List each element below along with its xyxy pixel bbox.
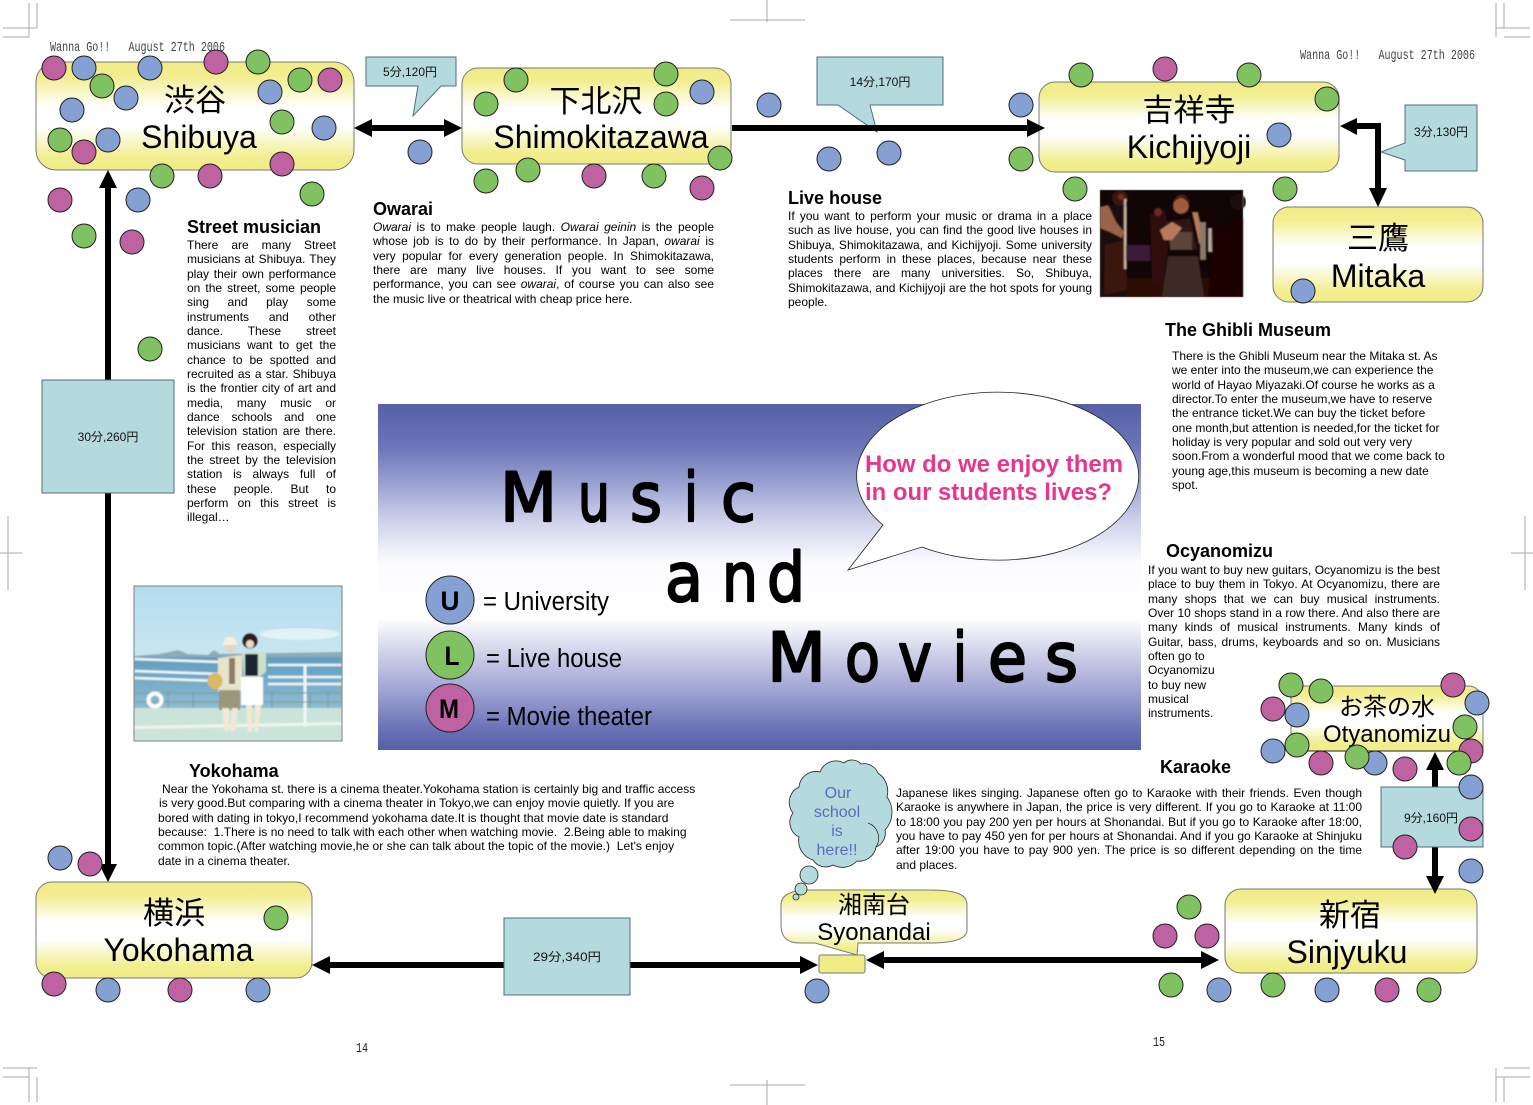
text: Yokohama xyxy=(158,782,695,868)
title: Music and Movies: i xyxy=(953,619,967,698)
legend: movie theater: = Movie theater xyxy=(486,703,652,731)
heading: Owarai: Owarai xyxy=(373,199,433,219)
title: Music and Movies: s xyxy=(630,459,662,538)
text: The Ghibli Museum: the entrance ticket.We can buy the ticket before xyxy=(1172,406,1425,420)
thought cloud: our school is here: Our xyxy=(825,785,852,802)
text: Yokohama: is very good.But comparing with a cinema theater in Tokyo,we can enjoy movie quietly. If you are xyxy=(159,796,674,810)
text: The Ghibli Museum: soon.From a wonderful mood that we come back to xyxy=(1172,449,1445,463)
text: Street musician: perform on this street is xyxy=(187,496,336,510)
text: Live house: Shimokitazawa, and Kichijyoji are the hot spots for young xyxy=(788,281,1092,295)
title: Music and Movies: o xyxy=(845,619,880,698)
text: The Ghibli Museum: holiday is very popular and sold out very very xyxy=(1172,435,1412,449)
legend: university: = University xyxy=(483,588,609,616)
station: Kichijyoji: Kichijyoji xyxy=(1127,129,1251,165)
station: Ocyanomizu: お茶の水 xyxy=(1339,694,1435,721)
text: Karaoke: Karaoke is anywhere in Japan, the price is very different. If you go to Karaoke at 11:00 xyxy=(896,800,1362,814)
station: Syonandai callout xyxy=(781,890,967,973)
text: Owarai: the music live or theatrical with cheap price here. xyxy=(373,292,632,306)
thought cloud: our school is here: here!! xyxy=(817,842,857,859)
text: Karaoke xyxy=(896,786,1362,872)
arrows xyxy=(99,118,1444,974)
station: Shimokitazawa: 下北沢 xyxy=(550,84,642,119)
text: Ocyanomizu: place to buy them in Tokyo. At Ocyanomizu, there are xyxy=(1148,577,1440,591)
legend: live house: = Live house xyxy=(486,645,622,673)
text: Street musician xyxy=(187,238,336,524)
title: Music and Movies: M xyxy=(767,619,826,698)
title: Music and Movies: d xyxy=(767,539,805,618)
text: Ocyanomizu: Guitar, bass, drums, keyboards and so on. Musicians xyxy=(1148,635,1440,649)
station: Yokohama: Yokohama xyxy=(103,932,254,968)
callout: 3 minutes 130 yen: 3分,130円 xyxy=(1414,125,1468,139)
text: Ocyanomizu: Ocyanomizu xyxy=(1148,663,1215,677)
legend: live house xyxy=(426,631,622,679)
text: Street musician: dance schools and one xyxy=(187,410,336,424)
text: Street musician: television station are there. xyxy=(187,424,336,438)
title: Music and Movies: u xyxy=(578,459,610,538)
station: Yokohama: 横浜 xyxy=(143,896,205,931)
station: Sinjyuku xyxy=(1225,889,1477,973)
text: Ocyanomizu: musical xyxy=(1148,692,1189,706)
station: Shimokitazawa xyxy=(462,68,731,164)
station: Mitaka: 三鷹 xyxy=(1347,221,1409,256)
title: Music and Movies: M xyxy=(500,459,557,538)
station: Shibuya xyxy=(36,62,354,170)
text: Street musician: play their own performance xyxy=(187,267,336,281)
text: Yokohama: common topic.(After watching movie,he or she can talk about the topic of the movie.) Let's enjoy xyxy=(158,839,674,853)
text: The Ghibli Museum: young age,this museum is becoming a new date xyxy=(1172,464,1429,478)
text: Karaoke: and places. xyxy=(896,858,957,872)
price box: Ocyanomizu to Sinjyuku: 9分,160円 xyxy=(1404,811,1458,825)
heading: Live house: Live house xyxy=(788,188,882,208)
text: Owarai: very popular for every generation people. In Shimokitazawa, xyxy=(373,249,714,263)
station: Shimokitazawa: Shimokitazawa xyxy=(493,119,709,155)
callout: 5 minutes 120 yen xyxy=(366,57,456,116)
text: Street musician: For this reason, especially xyxy=(187,439,336,453)
station: Shibuya: 渋谷 xyxy=(164,83,226,118)
text: The Ghibli Museum: There is the Ghibli Museum near the Mitaka st. As xyxy=(1172,349,1437,363)
text: Street musician: There are many Street xyxy=(187,238,336,252)
text: Live house: students perform in these places, because near these xyxy=(788,252,1092,266)
text: Ocyanomizu: to buy new xyxy=(1148,678,1206,692)
text: Ocyanomizu: If you want to buy new guitars, Ocyanomizu is the best xyxy=(1148,563,1440,577)
text: Street musician: media, many music or xyxy=(187,396,336,410)
price box: Yokohama to Syonandai xyxy=(504,918,630,995)
text: Ocyanomizu: instruments. xyxy=(1148,706,1213,720)
text: Karaoke: after 19:00 you have to pay 900 yen. The price is so different depending on the time xyxy=(896,843,1362,857)
callout: 14 minutes 170 yen xyxy=(817,57,943,132)
title: Music and Movies: s xyxy=(1045,619,1078,698)
text: Live house: people. xyxy=(788,295,827,309)
thought cloud: our school is here xyxy=(789,760,892,900)
title: Music and Movies xyxy=(500,459,1078,698)
page number 15: 15 xyxy=(1153,1036,1165,1051)
text: Ocyanomizu: Over 10 shops stand in a row there. And also there are xyxy=(1148,606,1440,620)
text: Street musician: chance to be spotted and xyxy=(187,353,336,367)
text: The Ghibli Museum: world of Hayao Miyazaki.Of course he works as a xyxy=(1172,378,1435,392)
photo: live band xyxy=(1100,190,1246,297)
text: Ocyanomizu: many shops that we can buy musical instruments. xyxy=(1148,592,1440,606)
text: Live house: Shibuya, Shimokitazawa, and Kichijyoji. Some university xyxy=(788,238,1092,252)
legend: movie theater xyxy=(426,684,652,732)
text: Karaoke: you have to pay 450 yen for per hours at Shonandai. And if you go Karaoke at Shinjuku xyxy=(896,829,1362,843)
heading: Yokohama: Yokohama xyxy=(189,761,279,781)
station: Mitaka: Mitaka xyxy=(1331,258,1425,294)
text: Owarai xyxy=(373,220,714,306)
price box: Shibuya to Yokohama xyxy=(42,380,174,493)
text: Ocyanomizu: often go to xyxy=(1148,649,1205,663)
text: The Ghibli Museum: one month,but attention is needed,for the ticket for xyxy=(1172,421,1440,435)
page number 14: 14 xyxy=(356,1042,368,1057)
running header right: Wanna Go!! August 27th 2006 xyxy=(1300,49,1475,64)
speech bubble xyxy=(848,392,1139,570)
title: Music and Movies: a xyxy=(665,539,703,618)
text: Street musician: musicians at Shibuya. They xyxy=(187,252,336,266)
text: Street musician: musicians want to get the xyxy=(187,338,336,352)
heading: The Ghibli Museum: The Ghibli Museum xyxy=(1165,320,1331,340)
station: Shibuya: Shibuya xyxy=(141,119,257,155)
price box: Ocyanomizu to Sinjyuku xyxy=(1381,787,1483,847)
text: Karaoke: to 18:00 you pay 200 yen per hours at Shonandai. But if you go to Karaoke after 18:00, xyxy=(896,815,1362,829)
text: Street musician: dance. These street xyxy=(187,324,336,338)
text: The Ghibli Museum: spot. xyxy=(1172,478,1198,492)
text: The Ghibli Museum: we enter into the museum,we can experience the xyxy=(1172,363,1433,377)
text: Yokohama: because: 1.There is no need to talk with each other when watching movie. 2.Being able to making xyxy=(158,825,687,839)
legend: university: U xyxy=(440,586,460,616)
legend xyxy=(426,576,652,732)
text: Street musician: on the street, some people xyxy=(187,281,336,295)
text: The Ghibli Museum: director.To enter the museum,we have to reserve xyxy=(1172,392,1432,406)
station: Ocyanomizu: Otyanomizu xyxy=(1323,721,1451,748)
legend: live house: L xyxy=(444,641,460,671)
text: Street musician: station is always full of xyxy=(187,467,336,481)
title: Music and Movies: n xyxy=(722,539,758,618)
legend: movie theater: M xyxy=(439,694,459,724)
station: Sinjyuku: Sinjyuku xyxy=(1287,934,1407,970)
text: Karaoke: Japanese likes singing. Japanese often go to Karaoke with their friends. Even though xyxy=(896,786,1362,800)
running header left: Wanna Go!! August 27th 2006 xyxy=(50,41,225,56)
heading: Street musician: Street musician xyxy=(187,217,321,237)
text: Ocyanomizu: many kinds of musical instruments. Many kinds of xyxy=(1148,620,1440,634)
callout: 3 minutes 130 yen xyxy=(1381,105,1477,171)
text: Owarai: performance, you can see owarai, of course you can also see xyxy=(373,277,714,291)
station: Ocyanomizu xyxy=(1291,686,1483,751)
heading: Karaoke: Karaoke xyxy=(1160,757,1231,777)
station: Syonandai callout: Syonandai xyxy=(817,919,931,946)
station: Kichijyoji: 吉祥寺 xyxy=(1142,93,1236,128)
text: Street musician: instruments and other xyxy=(187,310,336,324)
thought cloud: our school is here: is xyxy=(831,823,843,840)
text: Yokohama: Near the Yokohama st. there is a cinema theater.Yokohama station is certainly big and traffic access xyxy=(162,782,695,796)
station: Yokohama xyxy=(36,882,312,978)
text: Live house: places there are many universities. So, Shibuya, xyxy=(788,266,1092,280)
text: Yokohama: bored with dating in tokyo,I recommend yokohama date.It is thought that movie date is standard xyxy=(158,811,668,825)
text: Yokohama: date in a cinema theater. xyxy=(158,854,290,868)
text: Street musician: the street by the television xyxy=(187,453,336,467)
price box: Yokohama to Syonandai: 29分,340円 xyxy=(533,950,601,964)
station: Kichijyoji xyxy=(1039,82,1339,172)
text: Owarai: whose job is to do by their performance. In Japan, owarai is xyxy=(373,234,714,248)
text: Live house: If you want to perform your music or drama in a place xyxy=(788,209,1092,223)
text: Street musician: is the frontier city of art and xyxy=(187,381,336,395)
thought cloud: our school is here: school xyxy=(814,804,860,821)
title: Music and Movies: i xyxy=(684,459,698,538)
text: Street musician: these people. But to xyxy=(187,482,336,496)
text: Street musician: sing and play some xyxy=(187,295,336,309)
text: Ocyanomizu xyxy=(1148,563,1440,720)
text: The Ghibli Museum xyxy=(1172,349,1445,492)
text: Live house: such as live house, you can find the good live houses in xyxy=(788,223,1092,237)
callout: 5 minutes 120 yen: 5分,120円 xyxy=(383,65,437,79)
heading: Ocyanomizu: Ocyanomizu xyxy=(1166,541,1273,561)
text: Owarai: there are many live houses. If you want to see some xyxy=(373,263,714,277)
text: Live house xyxy=(788,209,1092,309)
price box: Shibuya to Yokohama: 30分,260円 xyxy=(78,430,138,444)
text: Owarai: Owarai is to make people laugh. Owarai geinin is the people xyxy=(373,220,714,234)
legend: university xyxy=(426,576,609,624)
photo: Yokohama pier xyxy=(134,586,342,741)
station: Syonandai callout: 湘南台 xyxy=(838,892,910,919)
text: Street musician: illegal… xyxy=(187,510,230,524)
speech bubble: in our students lives? xyxy=(865,479,1112,506)
station: Sinjyuku: 新宿 xyxy=(1319,898,1381,933)
station: Mitaka xyxy=(1273,207,1483,302)
centre panel background xyxy=(378,404,1141,750)
speech bubble: How do we enjoy them xyxy=(865,451,1123,478)
title: Music and Movies: v xyxy=(898,619,932,698)
text: Street musician: recruited as a star. Shibuya xyxy=(187,367,336,381)
title: Music and Movies: e xyxy=(988,619,1027,698)
callout: 14 minutes 170 yen: 14分,170円 xyxy=(850,75,910,89)
title: Music and Movies: c xyxy=(721,459,756,538)
